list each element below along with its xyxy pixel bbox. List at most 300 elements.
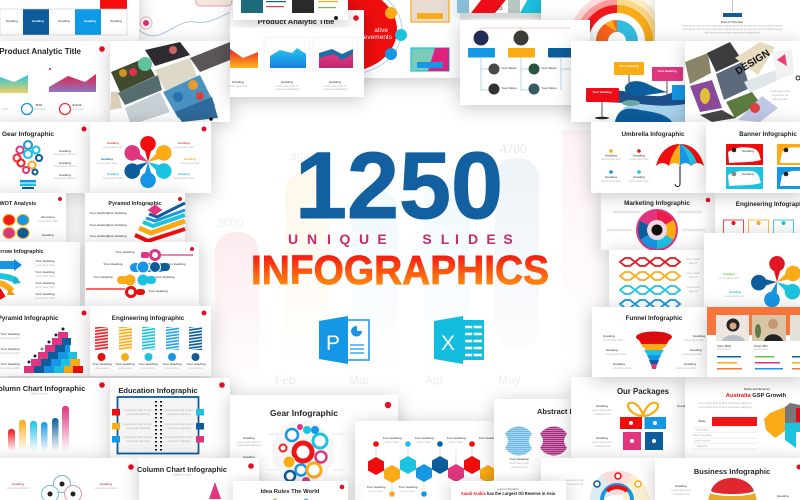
slide: radial wedges [541,458,655,500]
slide: our packages: consectetur elit [594,413,610,416]
slide: education: Lorem ipsum dolor sit amet [165,409,194,412]
slide: zigzag: dolor sit [689,276,698,279]
slide: engineering ribbons [90,306,211,376]
slide: gear arcs [541,0,662,86]
chart: petal pie [751,256,800,309]
slide: swot: Lorem ipsum dolor [38,220,58,223]
slide: six petals [90,122,211,193]
slide: abstract [494,399,577,500]
slide: column chart pink: Editable In Excel [173,474,191,476]
slide: education: consectetur adipiscing [167,440,191,443]
chart: stepped pyramid [135,203,185,241]
slide: timeline [655,0,800,41]
area chart: cyan [0,75,28,93]
slide: engineering cards [715,193,800,242]
chart: gradient columns [8,406,69,451]
slide: table: Heading [58,19,70,23]
slide: umbrella: Umbrella Infographic [622,131,685,138]
icon: excel: X [441,332,455,355]
slide: team: Tyler Matt [717,344,731,348]
slide: staircase pyramid: Your Heading [0,362,20,366]
slide: education: Lorem ipsum dolor sit amet [124,436,153,439]
slide: hexagon process: Lorem ipsum [401,490,415,493]
slide: 2021 product analytic: Lorem [2,108,8,111]
slide: column chart: Editable In Excel [30,392,48,396]
slide: swot: Business [41,215,55,219]
slide: australia gsp: Australia GSP Growth [726,393,787,399]
slide: our packages: Lorem ipsum dolor [592,409,612,412]
slide: timeline: Lorem ipsum dolor sit amet consectetur adipiscing elit [704,32,761,34]
slide: funnel: Heading [606,348,618,352]
slide: hexagon process: Lorem ipsum [369,490,383,493]
slide: business: Heading [675,484,687,488]
slide: pyramid stripes: Your Heading [107,223,127,227]
slide: arrows: Your Heading [35,270,55,274]
slide: pyramid stripes: Your Heading [107,234,127,238]
banner: cyan: Heading [742,172,754,176]
slide: idea rules the world [233,481,348,500]
slide: column chart pink: Column Chart Infographic [137,465,227,474]
slide: team: Lorem ipsum [754,348,768,351]
chart: staircase [24,328,83,373]
slide: pyramid stripes: Your Heading [89,223,109,227]
slide: gear lightbulb [0,122,90,193]
slide: circles [0,458,139,500]
slide: hexagon process: Lorem ipsum [385,441,399,444]
subtitle: unique slides: S [422,231,432,247]
slide: pie petals [704,233,800,309]
slide: engineering ribbons: Your Heading [162,362,182,366]
slide: funnel: Heading [613,362,625,366]
slide: photo collage right: adipiscing sed [772,98,788,101]
slide: zigzag: dolor sit [689,262,698,265]
subtitle: unique slides: U [288,231,298,247]
slide: photo collage right: Lorem ipsum dolor [770,90,790,93]
slide: funnel: Heading [684,362,696,366]
slide: business [655,458,800,500]
slide: chain: Your Heading [103,262,123,266]
slide: 2021 product analytic: Lorem ipsum [32,108,46,111]
area chart: pink [49,74,96,92]
slide: pyramid stripes: Your Heading [107,211,127,215]
slide: engineering cards: Your Heading [749,237,768,241]
slide: education: Lorem ipsum dolor sit amet [124,409,153,412]
slide: six petals: Heading [107,172,119,176]
slide: funnel: Lorem ipsum dolor [606,353,626,356]
slide: chain: Your Heading [166,262,186,266]
slide: business: consectetur elit [673,493,689,496]
chart: funnel [636,332,672,369]
slide: six petals: Lorem ipsum dolor [103,146,123,149]
table: growth: Western Australia [693,434,712,437]
slide: idea rules the world: Idea Rules The World [261,489,320,495]
slide: arrows: Your Heading [35,292,55,296]
table: growth [693,417,757,449]
slide: radial wedges: Lorem ipsum dolor [565,479,585,482]
slide: six petals: Heading [107,141,119,145]
slide: six petals: Lorem ipsum dolor [174,146,194,149]
icon: excel [434,316,484,364]
subtitle: unique slides: L [441,231,450,247]
slide: education: consectetur adipiscing [167,427,191,430]
slide: curve process [139,0,260,41]
slide: chain: Your Heading [93,275,113,279]
chart: overlapping circles [42,476,82,500]
slide: education [110,378,230,458]
slide: river: Your Heading [592,90,612,94]
slide: product analytic: consectetur adipiscing [323,88,347,91]
slide: umbrella [591,122,706,193]
subtitle: unique slides: E [377,231,387,247]
area chart: blue pink [313,37,358,71]
slide: arrows: Lorem ipsum dolor [35,275,55,278]
slide: chain: Your Heading [155,275,175,279]
slide: photo collage right: DESIGN [734,48,772,78]
slide: six petals: Heading [184,157,196,161]
slide: six petals: Lorem ipsum dolor [103,177,123,180]
icon: powerpoint: P [326,332,340,355]
slide: chain: Your Heading [115,250,135,254]
slide: river: Your Heading [657,69,677,73]
icon: notebook [112,397,204,454]
subtitle: unique slides [288,231,513,247]
area chart: red gold [230,49,258,68]
slide: timeline: Lorem ipsum dolor sit amet consectetur adipiscing elit sed do eiusmod tempor incididunt labore [682,24,783,28]
slide: business: Heading [777,494,789,498]
subtitle: unique slides: Q [340,231,351,247]
slide: arrows: Your Heading [35,259,55,263]
slide: umbrella: Lorem ipsum dolor [601,180,621,183]
slide: 2021 product analytic: $19.2k [72,103,82,107]
slide: column chart [0,378,110,458]
background faded column chart: 4700 [500,142,527,156]
slide: abstract: Your Heading [543,457,563,461]
background faded column chart: May [498,373,521,387]
slide: umbrella: Lorem ipsum dolor [629,180,649,183]
slide: engineering ribbons: Lorem ipsum [141,367,155,370]
slide: education: Lorem ipsum dolor sit amet [165,436,194,439]
slide: gear head: consectetur adipiscing [237,444,261,447]
slide: circles: Heading [100,482,112,486]
slide: gear head: Heading [243,455,255,459]
background faded column chart: Mar [349,373,370,387]
slide: column chart pink [137,458,259,500]
slide: engineering ribbons: Lorem ipsum [165,367,179,370]
slide: gear lightbulb: Heading [59,161,71,165]
slide: pie petals: Lorem ipsum dolor [719,277,739,280]
slide: umbrella: Heading [633,154,645,158]
slide: product analytic: Heading [232,80,244,84]
slide: team thumbnails [233,0,348,20]
slide: funnel [592,307,707,377]
slide: saudi arabia: Saudi Arabia has the Largest Oil Reserve in Asia [461,491,555,496]
icon: blue blob [505,426,532,456]
slide: photo collage left [110,41,230,122]
slide: education: consectetur adipiscing [167,413,191,416]
table: growth: Tasmania [697,445,708,448]
slide: umbrella: Heading [605,154,617,158]
background faded column chart: 4500 [290,151,317,165]
slide: umbrella: Heading [605,175,617,179]
slide: funnel: Funnel Infographic [626,315,683,322]
slide: red creative achievements: ative [374,27,388,34]
slide: umbrella: Lorem ipsum dolor [601,158,621,161]
slide: abstract: Abstract In [537,407,577,416]
slide: product analytic: Lorem ipsum dolor [228,85,248,88]
slide: hexagon process: Your Heading [366,485,386,489]
slide: funnel: Heading [603,334,615,338]
slide: gear lightbulb: Lorem ipsum dolor sit [54,165,77,168]
slide: funnel: Heading [693,334,705,338]
slide: australia gsp: Lorem ipsum dolor sit amet consectetur adipiscing [698,406,752,409]
slide: funnel: Lorem ipsum dolor [613,367,633,370]
slide: arrows: Lorem ipsum dolor [35,297,55,300]
slide: pyramid stripes: Your Heading [89,234,109,238]
title: 1250: 1250 [295,133,503,239]
slide: education: Lorem ipsum dolor sit amet [165,423,194,426]
subtitle: unique slides: D [468,231,478,247]
slide: abstract: Your Heading [509,457,529,461]
slide: engineering ribbons: Your Heading [186,362,206,366]
banner: orange [777,144,800,165]
slide: photo strip 03 04: 03 [497,6,503,12]
chart: layered dome [707,478,758,500]
slide: six petals: Lorem ipsum dolor [97,162,117,165]
photo: team member one [716,315,749,341]
table: growth: State [698,419,706,423]
slide: hexagon process: Your Heading [446,436,466,440]
slide: funnel: Lorem ipsum dolor [684,339,704,342]
slide: umbrella: Lorem ipsum dolor [629,158,649,161]
slide: our packages [571,377,689,458]
slide: zigzag [609,250,704,308]
chart: wheel [637,210,677,250]
slide: six petals: Heading [178,141,190,145]
slide: business: Business Infographic [694,467,770,476]
slide: gear lightbulb: Heading [59,173,71,177]
icon: gift [620,403,666,450]
slide: team [707,307,800,377]
icon: clover [3,214,29,238]
slide: circles: Lorem ipsum dolor sit [95,487,118,490]
slide: education: consectetur adipiscing [126,427,150,430]
slide: arrows: Your Heading [35,281,55,285]
slide: product analytic [228,10,364,97]
slide: banners: Banner Infographic [739,131,797,138]
subtitle: unique slides: E [486,231,496,247]
chart: diamond chains [620,258,680,308]
sign: red [586,88,619,102]
slide: pyramid stripes: Your Heading [89,211,109,215]
slide: zigzag: Lorem ipsum [686,258,700,261]
slide: gear lightbulb: Lorem ipsum dolor sit [54,177,77,180]
slide: six petals: Lorem ipsum dolor [180,162,200,165]
slide: red creative achievements [288,0,460,78]
slide: gear lightbulb: Lorem ipsum dolor sit [54,153,77,156]
background faded column chart: Feb [275,373,296,387]
slide: staircase pyramid: Your Heading [0,347,20,351]
slide: our packages: Heading [596,436,608,440]
area chart: cyan blue [264,37,310,71]
slide: engineering ribbons: Your Heading [138,362,158,366]
slide: staircase pyramid: Your Heading [0,332,20,336]
slide: engineering ribbons: Engineering Infographic [112,315,185,322]
slide: circles: Heading [12,482,24,486]
chart: wedge ring [590,471,650,500]
chart: chain process [86,249,193,298]
slide: table: Heading [32,19,44,23]
background faded column chart [215,130,600,392]
background faded column chart: Apr [425,373,444,387]
slide: hexagon process: Your Heading [398,485,418,489]
slide: table: Heading [84,19,96,23]
slide: staircase pyramid: Lorem ipsum dolor [0,352,20,355]
table: growth: South Australia [694,440,711,442]
slide: pie petals: Heading [723,272,735,276]
slide: staircase pyramid: Lorem ipsum dolor [0,367,20,370]
subtitle: unique slides: S [503,231,513,247]
slide: hexagon process: Your Heading [478,436,498,440]
slide: gear head: Heading [243,436,255,440]
slide: table: Heading [110,19,122,23]
slide: product analytic: Lorem ipsum dolor sit [324,85,347,88]
slide: education: consectetur adipiscing [126,413,150,416]
subtitle: unique slides: I [455,231,459,247]
slide: six petals: Lorem ipsum dolor [174,177,194,180]
slide: education: consectetur adipiscing [126,440,150,443]
slide: zigzag: dolor sit [689,290,698,293]
slide: pyramid stripes [85,193,185,242]
slide: radial wedges: consectetur elit [567,483,583,486]
slide: hexagon process: Lorem ipsum [417,441,431,444]
slide: timeline: End of Timeline [721,20,743,24]
slide: gear head: Gear Infographic [270,408,338,418]
icon: gear bulb [14,141,42,189]
slide: arrows [0,242,80,306]
slide: engineering cards: Your Heading [774,237,793,241]
slide: river: Your Heading [619,64,639,68]
slide: org chart [460,20,590,105]
slide: staircase pyramid: Lorem ipsum dolor [0,337,20,340]
slide: swot: Heading [42,233,54,237]
slide: red creative achievements: hievements [359,34,393,41]
photo: team member two [752,315,786,341]
slide: saudi arabia [451,481,566,500]
slide: our packages: Lorem ipsum dolor [592,441,612,444]
slide: team: Lorem ipsum [717,348,731,351]
icon: umbrella [656,144,704,186]
slide: australia gsp: Lorem ipsum dolor sit amet consectetur adipiscing [698,402,752,405]
slide: our packages: consectetur elit [594,445,610,448]
slide: 2021 product analytic: $504 [36,103,43,107]
slide: hexagon process: Your Heading [382,436,402,440]
slide: 2021 product analytic [0,41,110,122]
slide: photo collage right: consectetur elit [772,94,788,97]
subtitle: unique slides: N [307,231,317,247]
slide: photo strip 03 04: 04 [555,6,561,12]
chart: curved arrows [0,259,22,298]
slide: engineering ribbons: Lorem ipsum [95,367,109,370]
slide: staircase pyramid [0,306,90,376]
slide: chain: Your Heading [148,289,168,293]
slide: our packages: Heading [677,404,689,408]
slide: arrows: Lorem ipsum dolor [35,286,55,289]
slide: org chart: Your Name [541,86,557,90]
slide: funnel: Heading [690,348,702,352]
slide: hexagon process [355,421,498,500]
slide: pie petals: Heading [729,290,741,294]
heading: infographics: INFOGRAPHICS [251,247,549,293]
slide: umbrella: Heading [633,175,645,179]
slide: six petals: Heading [178,172,190,176]
slide: engineering ribbons: Your Heading [115,362,135,366]
slide: swot [0,193,66,242]
banner: blue [777,167,800,189]
slide: photo collage right [685,41,800,122]
slide: zigzag: Lorem ipsum [686,272,700,275]
slide: 2021 product analytic: Lorem ipsum [70,108,84,111]
slide: engineering ribbons: Lorem ipsum [118,367,132,370]
slide: banners [706,122,800,193]
slide: funnel: Lorem ipsum dolor [676,367,696,370]
slide: engineering ribbons: Lorem ipsum [189,367,203,370]
slide: engineering cards: Your Heading [724,237,743,241]
slide: engineering ribbons: Your Heading [92,362,112,366]
map: australia [764,403,800,448]
slide: org chart: Your Name [541,66,557,70]
slide: pie petals: Lorem ipsum dolor [725,295,745,298]
icon: purple blob [540,426,567,456]
slide: our packages: Our Packages [617,387,670,396]
slide: product analytic: Heading [329,80,341,84]
table: growth: Queensland [696,428,709,432]
slide: australia gsp: Name and Services [744,387,770,391]
slide: table: Heading [6,19,18,23]
chart: petal wheel [122,136,174,188]
slide: org chart: Your Name [501,86,517,90]
slide: abstract: Lorem ipsum dolor [509,462,529,465]
slide: product analytic: Lorem ipsum dolor sit [276,85,299,88]
slide: education: Education Infographic [118,386,198,395]
subtitle: unique slides: I [327,231,331,247]
icon: gear head [272,421,334,485]
slide: marketing [601,193,715,250]
background faded column chart: 3000 [217,216,244,230]
slide: gear lightbulb: Heading [59,149,71,153]
slide: gear head: Lorem ipsum dolor sit [238,441,261,444]
slide: education: Lorem ipsum dolor sit amet [124,423,153,426]
slide: gear lightbulb: Gear Infographic [2,131,54,138]
slide: marketing: Marketing Infographic [624,200,690,207]
chart: skill bars [717,356,800,370]
slide: table [0,0,139,41]
slide: timeline: Lorem ipsum dolor sit amet consectetur adipiscing elit sed do eiusmod tempor incididunt labore [682,28,783,31]
slide: circles: Lorem ipsum dolor sit [7,487,30,490]
slide: business: Lorem ipsum dolor [671,489,691,492]
slide: zigzag: Lorem ipsum [686,286,700,289]
slide: hexagon process: Lorem ipsum [449,441,463,444]
slide: funnel: Lorem ipsum dolor [603,339,623,342]
slide: pyramid stripes: Pyramid Infographic [108,201,162,207]
chart: pink column [209,482,221,499]
slide: arrows: Lorem ipsum dolor [35,264,55,267]
slide: six petals: Heading [101,157,113,161]
banner: red: Heading [742,149,754,153]
slide: river [571,41,685,122]
slide: product analytic: consectetur adipiscing [275,88,299,91]
slide: product analytic: Product Analytic Title [258,17,334,26]
slide: our packages: Heading [596,404,608,408]
